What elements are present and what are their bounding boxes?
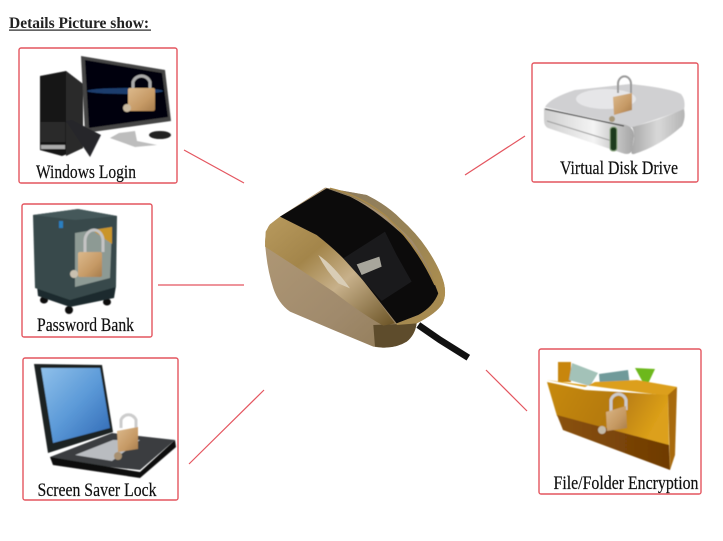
connector: Windows Login	[184, 150, 244, 183]
gold top band	[265, 217, 395, 326]
icon: laptop with lock	[34, 364, 176, 478]
icon: padlock	[609, 76, 632, 122]
panel: Screen Saver Lock	[23, 358, 178, 501]
connector: Virtual Disk Drive	[465, 136, 525, 175]
icon: padlock	[598, 394, 627, 434]
connector: Screen Saver Lock	[189, 390, 264, 464]
sensor window	[343, 232, 412, 301]
icon: padlock	[70, 230, 103, 278]
device body	[265, 188, 445, 348]
panel: Windows Login	[19, 48, 177, 183]
black sensor cover	[280, 188, 438, 323]
highlight on band	[318, 255, 350, 288]
dark bottom corner	[373, 323, 417, 348]
front rim below sensor	[397, 293, 443, 325]
fingerprint reader device	[265, 188, 468, 358]
panel: File/Folder Encryption	[539, 349, 701, 494]
icon: disk drive with lock	[544, 76, 685, 154]
panel: Virtual Disk Drive	[532, 63, 698, 182]
panel: Virtual Disk Drive: Virtual Disk Drive	[560, 159, 678, 179]
panel: File/Folder Encryption: File/Folder Encryption	[554, 474, 698, 494]
icon: padlock	[114, 415, 138, 460]
icon: computer with lock	[40, 56, 171, 157]
cable	[418, 325, 468, 358]
icon: safe with lock	[33, 209, 117, 314]
panel: Password Bank: Password Bank	[37, 316, 135, 336]
panel: Screen Saver Lock: Screen Saver Lock	[38, 481, 157, 501]
connector: Password Bank	[158, 284, 244, 286]
panel: Password Bank	[22, 204, 152, 337]
thin bright rim line	[330, 188, 435, 285]
panel: Windows Login: Windows Login	[36, 163, 136, 183]
icon: folder with lock	[547, 362, 677, 470]
right gold rim	[325, 188, 445, 303]
title: Details Picture show:	[9, 15, 149, 32]
fingerprint reflection	[357, 257, 382, 275]
connector: File/Folder Encryption	[486, 370, 527, 411]
icon: padlock	[123, 76, 155, 112]
